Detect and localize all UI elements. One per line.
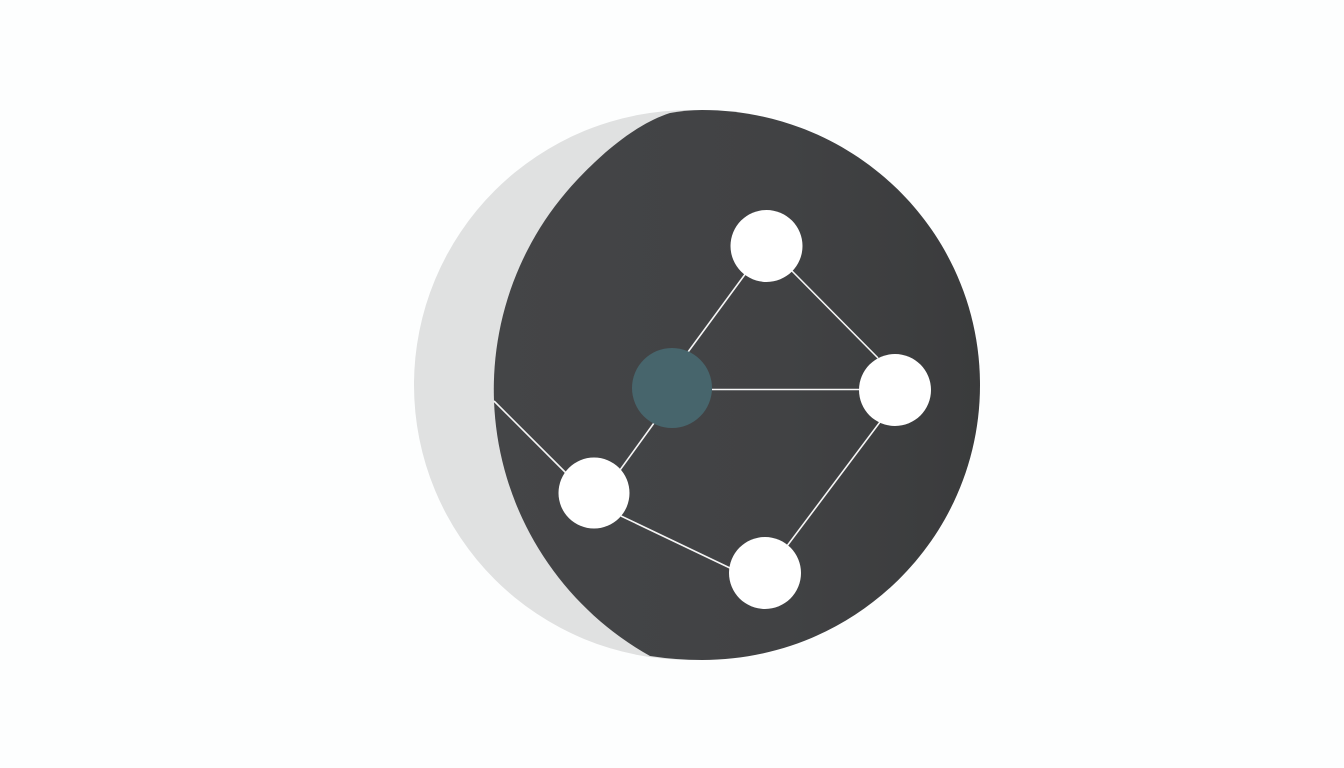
white node top: [730, 210, 802, 282]
white node bottom: [729, 537, 801, 609]
white node right: [859, 354, 931, 426]
teal centre node: [632, 348, 712, 428]
dark disc: [494, 110, 980, 660]
light grey crescent shadow: [414, 110, 966, 660]
white node lower left: [558, 458, 630, 528]
network connection lines: [494, 271, 880, 569]
